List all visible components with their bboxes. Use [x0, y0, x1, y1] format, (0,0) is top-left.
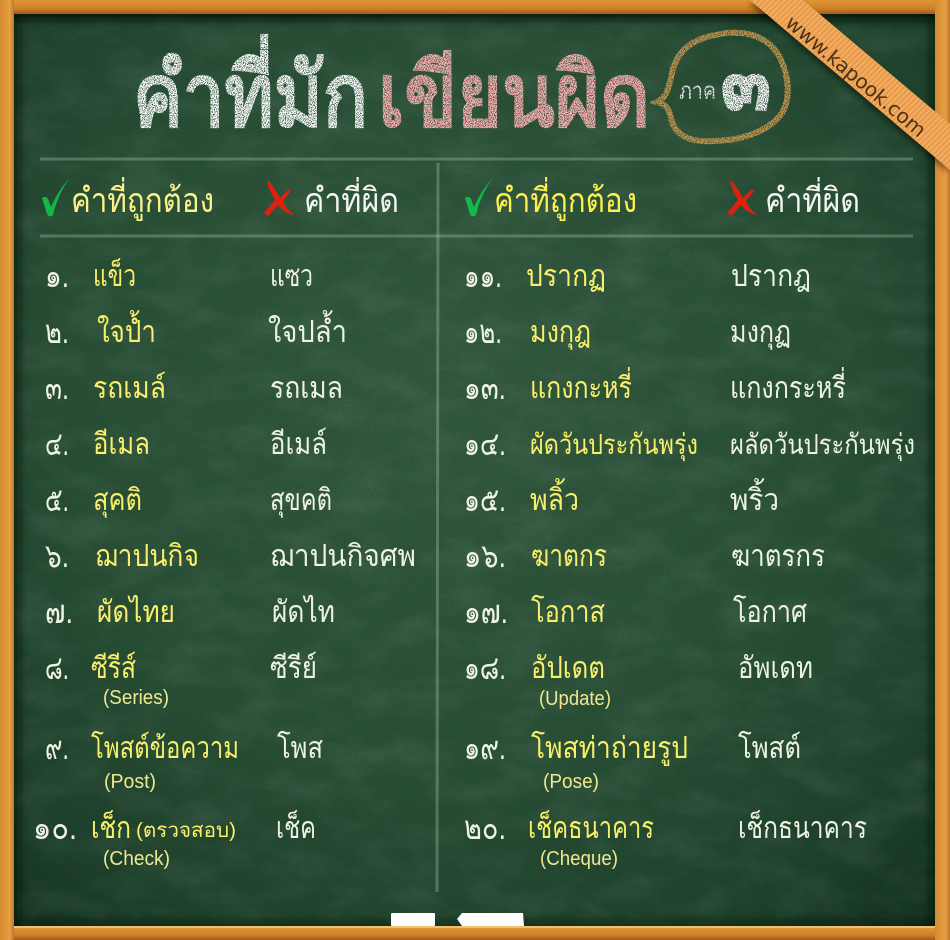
- row 2: [45, 310, 347, 350]
- icon: green check: [42, 178, 70, 216]
- row 13: [464, 367, 846, 406]
- row 15: พริ้ว: [730, 478, 779, 517]
- row 15: [464, 478, 779, 518]
- row 10: ๑๐.: [33, 809, 77, 846]
- row 14: ๑๔.: [464, 425, 506, 462]
- heading: correct words: คำที่ถูกต้อง: [71, 177, 214, 221]
- row 14: ผัดวันประกันพรุ่ง: [530, 429, 698, 462]
- row 7: ๗.: [45, 593, 73, 630]
- row 7: ผัดไท: [272, 594, 335, 629]
- row 1: แซว: [270, 260, 313, 293]
- row 17: โอกาศ: [733, 594, 807, 629]
- row 11: ปรากฎ: [731, 260, 811, 293]
- heading: wrong words: คำที่ผิด: [304, 177, 399, 220]
- row 20: ๒๐.: [464, 809, 506, 846]
- row 12: มงกุฏ: [730, 316, 791, 351]
- row 5: สุคติ: [93, 484, 142, 519]
- row 2: ใจปล้ำ: [268, 310, 347, 349]
- row 1: ๑.: [45, 257, 69, 294]
- chalk piece: right: [457, 913, 524, 926]
- row 19: โพสต์: [738, 730, 801, 765]
- row 17: โอกาส: [531, 594, 605, 629]
- row 7: [45, 593, 335, 630]
- right word list: [464, 257, 915, 870]
- row 3: รถเมล: [270, 372, 343, 405]
- row 15: พลิ้ว: [530, 478, 579, 517]
- row 10: เช็ค: [276, 809, 316, 845]
- right column headers: [465, 177, 860, 221]
- row 18: [464, 649, 813, 710]
- row 1: [45, 257, 313, 294]
- row 20: เช็กธนาคาร: [738, 809, 867, 845]
- row 18: อัพเดท: [738, 652, 813, 685]
- row 19: [464, 729, 801, 793]
- row 13: ๑๓.: [464, 369, 506, 406]
- row 3: รถเมล์: [93, 371, 166, 405]
- row 17: [464, 593, 807, 630]
- row 4: [45, 425, 327, 462]
- row 10: เช็ก: [91, 809, 131, 845]
- part 3 speech bubble badge: ภาค: [679, 78, 716, 105]
- row 4: อีเมล: [93, 428, 150, 461]
- row 12: ๑๒.: [464, 313, 502, 350]
- row 2: ใจป้ำ: [97, 310, 156, 349]
- row 19: โพสท่าถ่ายรูป: [531, 730, 688, 766]
- part 3 speech bubble badge: ๓: [722, 45, 770, 123]
- row 20: [464, 809, 867, 870]
- row 6: ฌาปนกิจ: [95, 540, 199, 573]
- row 9: (Post): [104, 771, 156, 793]
- row 5: [45, 481, 332, 519]
- row 6: [45, 537, 416, 574]
- icon: red cross: [264, 180, 295, 216]
- table rules: [40, 159, 913, 892]
- row 9: [45, 729, 323, 793]
- row 15: ๑๕.: [464, 481, 506, 518]
- row 20: (Cheque): [540, 848, 618, 870]
- row 8: ซีรีส์: [91, 651, 136, 685]
- row 16: ฆาตกร: [531, 540, 607, 573]
- row 16: ฆาตรกร: [731, 540, 825, 573]
- row 3: ๓.: [45, 369, 69, 406]
- row 18: ๑๘.: [464, 649, 506, 686]
- row 11: [464, 257, 811, 294]
- row 4: ๔.: [45, 425, 69, 462]
- row 19: ๑๙.: [464, 729, 506, 766]
- row 10: (ตรวจสอบ): [136, 820, 236, 842]
- row 6: ๖.: [45, 537, 69, 574]
- row 6: ฌาปนกิจศพ: [270, 540, 416, 573]
- row 12: [464, 313, 791, 351]
- row 10: (Check): [103, 848, 170, 870]
- heading: correct words: คำที่ถูกต้อง: [494, 177, 637, 221]
- heading: wrong words: คำที่ผิด: [765, 177, 860, 220]
- row 4: อีเมล์: [270, 427, 327, 461]
- row 9: โพส: [277, 730, 323, 765]
- row 2: ๒.: [45, 313, 69, 350]
- row 14: ผลัดวันประกันพรุ่ง: [730, 429, 915, 462]
- left word list: [33, 257, 416, 870]
- row 8: ซีรีย์: [270, 651, 317, 685]
- title: เขียนผิด: [378, 46, 650, 145]
- left column headers: [42, 177, 399, 221]
- title: คำที่มัก: [133, 35, 368, 145]
- row 16: [464, 537, 825, 574]
- part 3 speech bubble badge: [657, 33, 788, 141]
- row 9: โพสต์ข้อความ: [91, 730, 239, 765]
- icon: red cross: [727, 180, 758, 216]
- title: [133, 35, 650, 145]
- chalk piece: left: [391, 913, 435, 926]
- icon: green check: [465, 178, 493, 216]
- row 7: ผัดไทย: [97, 594, 175, 629]
- row 12: มงกุฎ: [530, 316, 591, 351]
- chalk pieces on ledge: [391, 913, 524, 926]
- row 14: [464, 425, 915, 462]
- row 13: แกงกะหรี่: [530, 367, 632, 405]
- corner ribbon: www.kapook.com: www.kapook.com: [781, 10, 931, 142]
- row 10: [33, 809, 316, 870]
- row 18: อัปเดต: [531, 652, 605, 685]
- row 5: สุขคติ: [270, 484, 332, 519]
- row 11: ปรากฏ: [526, 260, 606, 293]
- row 8: [45, 649, 317, 709]
- row 17: ๑๗.: [464, 593, 508, 630]
- row 20: เช็คธนาคาร: [528, 809, 654, 845]
- row 16: ๑๖.: [464, 537, 506, 574]
- row 8: ๘.: [45, 649, 69, 686]
- row 19: (Pose): [543, 771, 599, 793]
- row 5: ๕.: [45, 481, 69, 518]
- row 3: [45, 369, 343, 406]
- row 8: (Series): [103, 687, 169, 709]
- corner ribbon: www.kapook.com: [750, 0, 950, 170]
- row 9: ๙.: [45, 729, 69, 766]
- row 13: แกงกระหรี่: [730, 367, 846, 405]
- row 1: แข็ว: [93, 257, 136, 293]
- row 18: (Update): [539, 688, 611, 710]
- row 11: ๑๑.: [464, 257, 502, 294]
